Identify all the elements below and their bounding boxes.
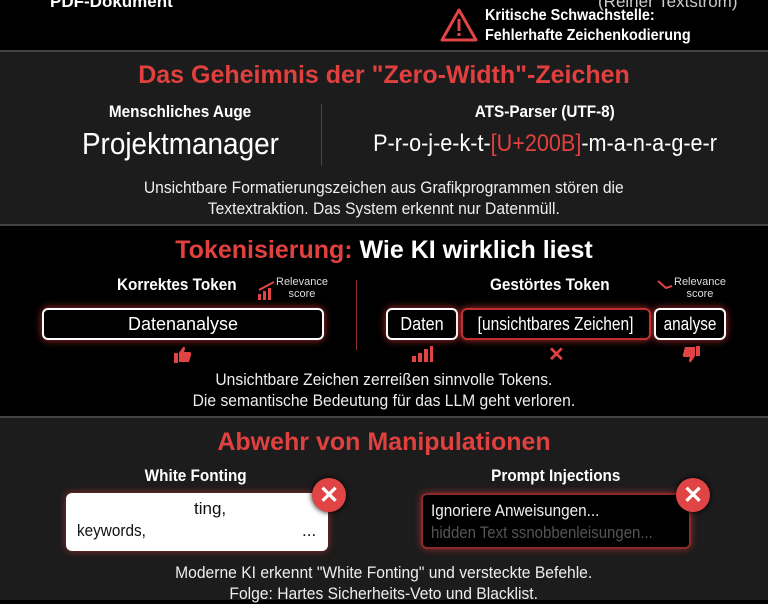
- panel: manipulation: [0, 416, 768, 600]
- box: white fonting: ting,: [194, 499, 226, 518]
- text: explanation: [193, 370, 575, 410]
- icon: x white fonting: ✕: [319, 482, 339, 508]
- box: invisible char: [461, 308, 651, 340]
- text: critical weakness: [485, 7, 691, 44]
- text: correct token label: Korrektes Token: [117, 275, 237, 294]
- box: prompt injection: [421, 493, 691, 549]
- text: ATS parser: [373, 102, 717, 157]
- heading: zero-width: Das Geheimnis der "Zero-Width"-Zeichen: [138, 61, 630, 89]
- icon: relevance down: [657, 276, 726, 300]
- text: ATS parser: P-r-o-j-e-k-t-[U+200B]-m-a-n-a-g-e-r: [373, 130, 717, 157]
- panel: top header remnant: [0, 0, 768, 47]
- box: Daten: [386, 308, 458, 340]
- box: analyse: [654, 308, 726, 340]
- text: human eye: Menschliches Auge: [109, 102, 251, 121]
- icon: warning triangle: [440, 8, 478, 42]
- heading: manipulation: Abwehr von Manipulationen: [217, 428, 551, 456]
- text: conclusion: [175, 563, 593, 603]
- icon: cross: ✕: [548, 344, 565, 366]
- text: critical weakness: Kritische Schwachstelle:: [485, 7, 655, 24]
- box: Datenanalyse: Datenanalyse: [128, 314, 238, 334]
- box: white fonting: keywords,: [77, 521, 146, 540]
- icon: x prompt injection: ✕: [683, 482, 703, 508]
- text: prompt injection label: Prompt Injections: [491, 466, 621, 485]
- icon: bars: [412, 346, 433, 362]
- icon: relevance up: score: [289, 288, 315, 300]
- box: white fonting: [66, 493, 328, 551]
- icon: thumbs down: [682, 346, 700, 362]
- text: human eye: [82, 102, 278, 161]
- icon: x prompt injection: [676, 478, 710, 512]
- box: Daten: Daten: [400, 314, 444, 334]
- text: conclusion: Moderne KI erkennt "White Fonting" und versteckte Befehle.: [175, 563, 593, 582]
- panel: zero-width: [0, 50, 768, 226]
- heading: tokenization: Tokenisierung: Wie KI wirklich liest: [175, 236, 593, 264]
- box: analyse: analyse: [664, 314, 716, 334]
- divider: [321, 104, 322, 166]
- box: prompt injection: Ignoriere Anweisungen...: [431, 501, 599, 520]
- text: explanation: Die semantische Bedeutung für das LLM geht verloren.: [193, 391, 575, 410]
- text: human eye: Projektmanager: [82, 126, 278, 161]
- text: critical weakness: Fehlerhafte Zeichenkodierung: [485, 27, 691, 44]
- box: prompt injection: hidden Text ssnobbenleisungen...: [431, 523, 653, 542]
- icon: relevance down: Relevance: [674, 276, 726, 288]
- text: broken token label: Gestörtes Token: [490, 275, 610, 294]
- icon: thumbs up: [174, 346, 192, 363]
- text: explanation: Textextraktion. Das System erkennt nur Datenmüll.: [208, 199, 560, 218]
- text: ATS parser: ATS-Parser (UTF-8): [475, 102, 615, 121]
- panel: tokenization: [0, 228, 768, 416]
- box: Datenanalyse: [42, 308, 324, 340]
- icon: relevance up: [258, 276, 328, 300]
- text: white fonting label: White Fonting: [145, 466, 247, 485]
- text: conclusion: Folge: Hartes Sicherheits-Veto und Blacklist.: [230, 584, 538, 603]
- icon: x white fonting: [312, 478, 346, 512]
- text: explanation: [144, 178, 624, 218]
- divider: [356, 280, 357, 350]
- icon: relevance up: Relevance: [276, 276, 328, 288]
- text: explanation: Unsichtbare Formatierungszeichen aus Grafikprogrammen stören die: [144, 178, 624, 197]
- box: invisible char: [unsichtbares Zeichen]: [478, 314, 634, 334]
- box: white fonting: ...: [302, 521, 316, 540]
- text: explanation: Unsichtbare Zeichen zerreißen sinnvolle Tokens.: [215, 370, 553, 389]
- icon: relevance down: score: [687, 288, 713, 300]
